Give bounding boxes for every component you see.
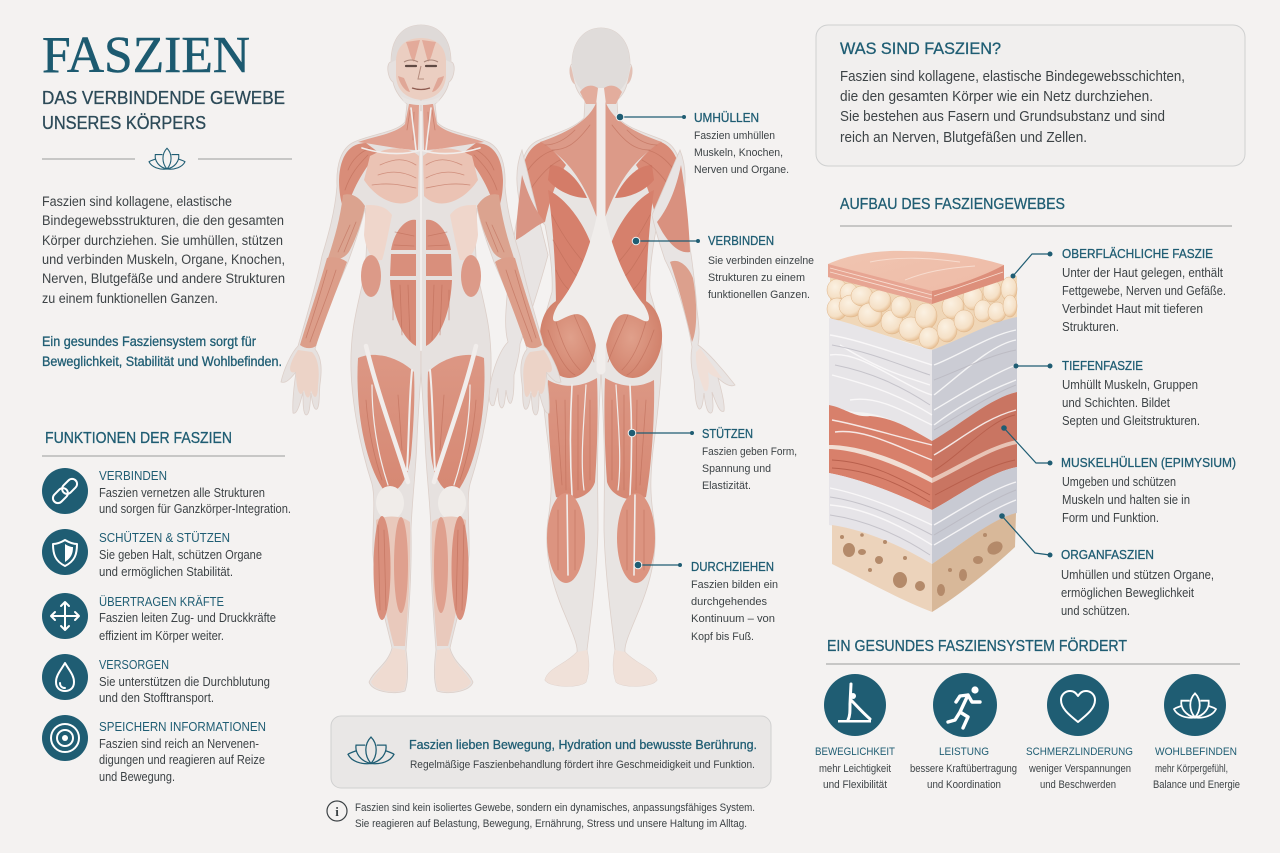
panel: Was sind Faszien: die den gesamten Körper wie ein Netz durchziehen. <box>840 89 1153 105</box>
label: Muskelhüllen (Epimysium): Muskeln und halten sie in <box>1062 493 1190 507</box>
label: Oberflächliche Faszie: Unter der Haut gelegen, enthält <box>1062 266 1223 280</box>
benefit: Leistung: bessere Kraftübertragung <box>910 763 1017 775</box>
benefit: Beweglichkeit: und Flexibilität <box>823 779 888 791</box>
function: Schützen und Stützen <box>42 529 262 579</box>
callout: Stützen <box>628 426 797 492</box>
callout: Durchziehen: durchgehendes <box>691 596 767 608</box>
callout: Umhüllen: Faszien umhüllen <box>694 130 775 142</box>
benefit: Schmerzlinderung <box>1026 674 1133 791</box>
icon: target <box>42 715 88 761</box>
callout: Umhüllen: Nerven und Organe. <box>694 164 789 176</box>
label: Tiefenfaszie: Umhüllt Muskeln, Gruppen <box>1062 378 1198 392</box>
label: Organfaszien: Umhüllen und stützen Organe, <box>1061 568 1214 582</box>
info note <box>327 801 755 830</box>
callout: Durchziehen: Kopf bis Fuß. <box>691 631 754 643</box>
icon: lotus <box>348 737 394 764</box>
label: Tiefenfaszie: Septen und Gleitstrukturen. <box>1062 414 1200 428</box>
function: Speichern Informationen: und Bewegung. <box>99 770 175 784</box>
icon: chain link <box>42 468 88 514</box>
callout: Umhüllen: Muskeln, Knochen, <box>694 147 783 159</box>
benefit: Schmerzlinderung: und Beschwerden <box>1040 779 1116 791</box>
figure: front view of fascia anatomy <box>281 25 561 693</box>
label: Tiefenfaszie: und Schichten. Bildet <box>1062 396 1170 410</box>
icon: water drop <box>42 654 88 700</box>
callout: Stützen: Spannung und <box>702 463 771 475</box>
callout: Verbinden: funktionellen Ganzen. <box>708 289 810 301</box>
function: Speichern Informationen: Faszien sind reich an Nervenen- <box>99 737 259 751</box>
benefit: Wohlbefinden: Balance und Energie <box>1153 779 1240 791</box>
benefit: Wohlbefinden <box>1153 674 1240 791</box>
label: Organfaszien: ermöglichen Beweglichkeit <box>1061 586 1194 600</box>
benefit: Beweglichkeit: mehr Leichtigkeit <box>819 763 892 775</box>
benefit: Wohlbefinden: mehr Körpergefühl, <box>1155 763 1228 775</box>
figure: back view of fascia anatomy <box>489 28 735 686</box>
title block <box>42 27 292 169</box>
highlight statement: Ein gesundes Fasziensystem sorgt für <box>42 334 256 349</box>
layer: connective base with holes <box>832 513 1016 612</box>
callout: Umhüllen <box>616 110 789 176</box>
label: Muskelhüllen (Epimysium): MUSKELHÜLLEN (EPIMYSIUM) <box>1061 455 1236 470</box>
label: Oberflächliche Faszie <box>1010 246 1226 334</box>
function: Schützen und Stützen: und ermöglichen Stabilität. <box>99 565 233 579</box>
layer: deep fascia <box>829 317 1017 441</box>
intro paragraph: und verbinden Muskeln, Organe, Knochen, <box>42 252 285 267</box>
panel: Was sind Faszien: Faszien sind kollagene, elastische Bindegewebsschichten, <box>840 69 1185 85</box>
layer: superficial fascia slab <box>828 251 1004 304</box>
heading: Aufbau des Fasziengewebes: AUFBAU DES FASZIENGEWEBES <box>840 196 1065 213</box>
function: Übertragen Kräfte: Faszien leiten Zug- und Druckkräfte <box>99 611 276 625</box>
function: Versorgen: Sie unterstützen die Durchblutung <box>99 675 270 689</box>
function: Versorgen <box>42 654 270 705</box>
icon: runner <box>933 673 997 737</box>
subtitle: DAS VERBINDENDE GEWEBE <box>42 87 285 108</box>
benefit: Leistung: und Koordination <box>927 779 1001 791</box>
intro paragraph: zu einem funktionellen Ganzen. <box>42 291 218 306</box>
label: Tiefenfaszie: TIEFENFASZIE <box>1062 358 1143 373</box>
benefit: Schmerzlinderung: weniger Verspannungen <box>1028 763 1131 775</box>
heading: Ein gesundes Fasziensystem fördert: EIN GESUNDES FASZIENSYSTEM FÖRDERT <box>827 637 1127 655</box>
label: Organfaszien: ORGANFASZIEN <box>1061 547 1154 562</box>
subtitle <box>42 87 285 133</box>
label: Muskelhüllen (Epimysium): Form und Funktion. <box>1062 511 1159 525</box>
label: Tiefenfaszie <box>1014 358 1200 428</box>
callout: Verbinden: VERBINDEN <box>708 233 774 248</box>
function: Speichern Informationen <box>42 715 266 784</box>
callout: Umhüllen: UMHÜLLEN <box>694 110 759 125</box>
intro paragraph: Nerven, Blutgefäße und andere Strukturen <box>42 271 285 286</box>
icon: shield <box>42 529 88 575</box>
callout: Stützen: Elastizität. <box>702 480 751 492</box>
title: FASZIEN <box>42 27 250 84</box>
callout: Verbinden: Sie verbinden einzelne <box>708 255 814 267</box>
label: Oberflächliche Faszie: Fettgewebe, Nerven und Gefäße. <box>1062 284 1226 298</box>
benefit: Leistung: LEISTUNG <box>939 746 989 758</box>
callout panel: Faszien lieben Bewegung <box>331 716 771 788</box>
callout: Durchziehen: DURCHZIEHEN <box>691 559 774 574</box>
heading: Funktionen: FUNKTIONEN DER FASZIEN <box>45 430 232 447</box>
callout: Stützen: STÜTZEN <box>702 426 753 441</box>
diagram: fascia tissue layers block <box>827 251 1017 612</box>
callout: Verbinden: Strukturen zu einem <box>708 272 805 284</box>
callout panel: Faszien lieben Bewegung: Faszien lieben Bewegung, Hydration und bewusste Berührung. <box>409 737 757 752</box>
function: Speichern Informationen: digungen und reagieren auf Reize <box>99 753 265 767</box>
layer: adipose <box>827 276 1017 350</box>
callout: Stützen: Faszien geben Form, <box>702 446 797 458</box>
panel: Was sind Faszien: reich an Nerven, Blutgefäßen und Zellen. <box>840 130 1087 146</box>
label: Oberflächliche Faszie: Strukturen. <box>1062 320 1119 334</box>
highlight statement: Beweglichkeit, Stabilität und Wohlbefinden. <box>42 354 282 369</box>
icon: yoga pose <box>824 674 886 736</box>
icon: heart <box>1047 674 1109 736</box>
panel: Funktionen der Faszien <box>42 430 291 784</box>
function: Speichern Informationen: SPEICHERN INFORMATIONEN <box>99 719 266 734</box>
icon: info: i <box>335 804 339 819</box>
label: Oberflächliche Faszie: OBERFLÄCHLICHE FASZIE <box>1062 246 1213 261</box>
function: Verbinden <box>42 468 291 516</box>
highlight statement <box>42 334 282 369</box>
callout: Durchziehen: Faszien bilden ein <box>691 579 778 591</box>
label: Organfaszien <box>999 513 1214 618</box>
subtitle: UNSERES KÖRPERS <box>42 112 206 133</box>
function: Verbinden: Faszien vernetzen alle Strukturen <box>99 486 265 500</box>
icon: lotus <box>149 148 185 169</box>
function: Übertragen Kräfte: ÜBERTRAGEN KRÄFTE <box>99 594 224 609</box>
layer: muscle epimysium <box>829 392 1017 510</box>
benefit: Schmerzlinderung: SCHMERZLINDERUNG <box>1026 746 1133 758</box>
benefit: Wohlbefinden: WOHLBEFINDEN <box>1155 746 1237 758</box>
intro paragraph <box>42 194 285 306</box>
function: Verbinden: VERBINDEN <box>99 468 167 483</box>
layer: organ fascia <box>829 467 1017 564</box>
callout: Verbinden <box>632 233 814 301</box>
callout: Durchziehen: Kontinuum – von <box>691 613 775 625</box>
function: Versorgen: und den Stofftransport. <box>99 691 214 705</box>
label: Muskelhüllen (Epimysium) <box>1001 425 1236 525</box>
function: Verbinden: und sorgen für Ganzkörper-Integration. <box>99 502 291 516</box>
benefit: Leistung <box>910 673 1017 791</box>
info note: Sie reagieren auf Belastung, Bewegung, Ernährung, Stress und unsere Haltung im Alltag. <box>355 818 747 830</box>
panel: Was sind Faszien: Sie bestehen aus Fasern und Grundsubstanz und sind <box>840 109 1165 125</box>
info note: Faszien sind kein isoliertes Gewebe, sondern ein dynamisches, anpassungsfähiges System. <box>355 802 755 814</box>
function: Schützen und Stützen: SCHÜTZEN & STÜTZEN <box>99 530 230 545</box>
benefit: Beweglichkeit <box>815 674 895 791</box>
icon: four-way arrows <box>42 593 88 639</box>
intro paragraph: Körper durchziehen. Sie umhüllen, stützen <box>42 233 283 248</box>
intro paragraph: Faszien sind kollagene, elastische <box>42 194 232 209</box>
intro paragraph: Bindegewebsstrukturen, die den gesamten <box>42 213 284 228</box>
panel: Was sind Faszien: WAS SIND FASZIEN? <box>840 39 1001 58</box>
callout: Durchziehen <box>634 559 778 643</box>
function: Schützen und Stützen: Sie geben Halt, schützen Organe <box>99 548 262 562</box>
icon: lotus <box>1164 674 1226 736</box>
label: Oberflächliche Faszie: Verbindet Haut mit tieferen <box>1062 302 1203 316</box>
callout panel: Faszien lieben Bewegung: Regelmäßige Faszienbehandlung fördert ihre Geschmeidigkeit und Funktion. <box>410 759 755 771</box>
icon: info <box>327 801 347 821</box>
function: Versorgen: VERSORGEN <box>99 657 169 672</box>
benefit: Beweglichkeit: BEWEGLICHKEIT <box>815 746 895 758</box>
function: Übertragen Kräfte <box>42 593 276 643</box>
label: Muskelhüllen (Epimysium): Umgeben und schützen <box>1062 475 1176 489</box>
function: Übertragen Kräfte: effizient im Körper weiter. <box>99 629 224 643</box>
panel: Was sind Faszien <box>816 25 1245 166</box>
label: Organfaszien: und schützen. <box>1061 604 1130 618</box>
